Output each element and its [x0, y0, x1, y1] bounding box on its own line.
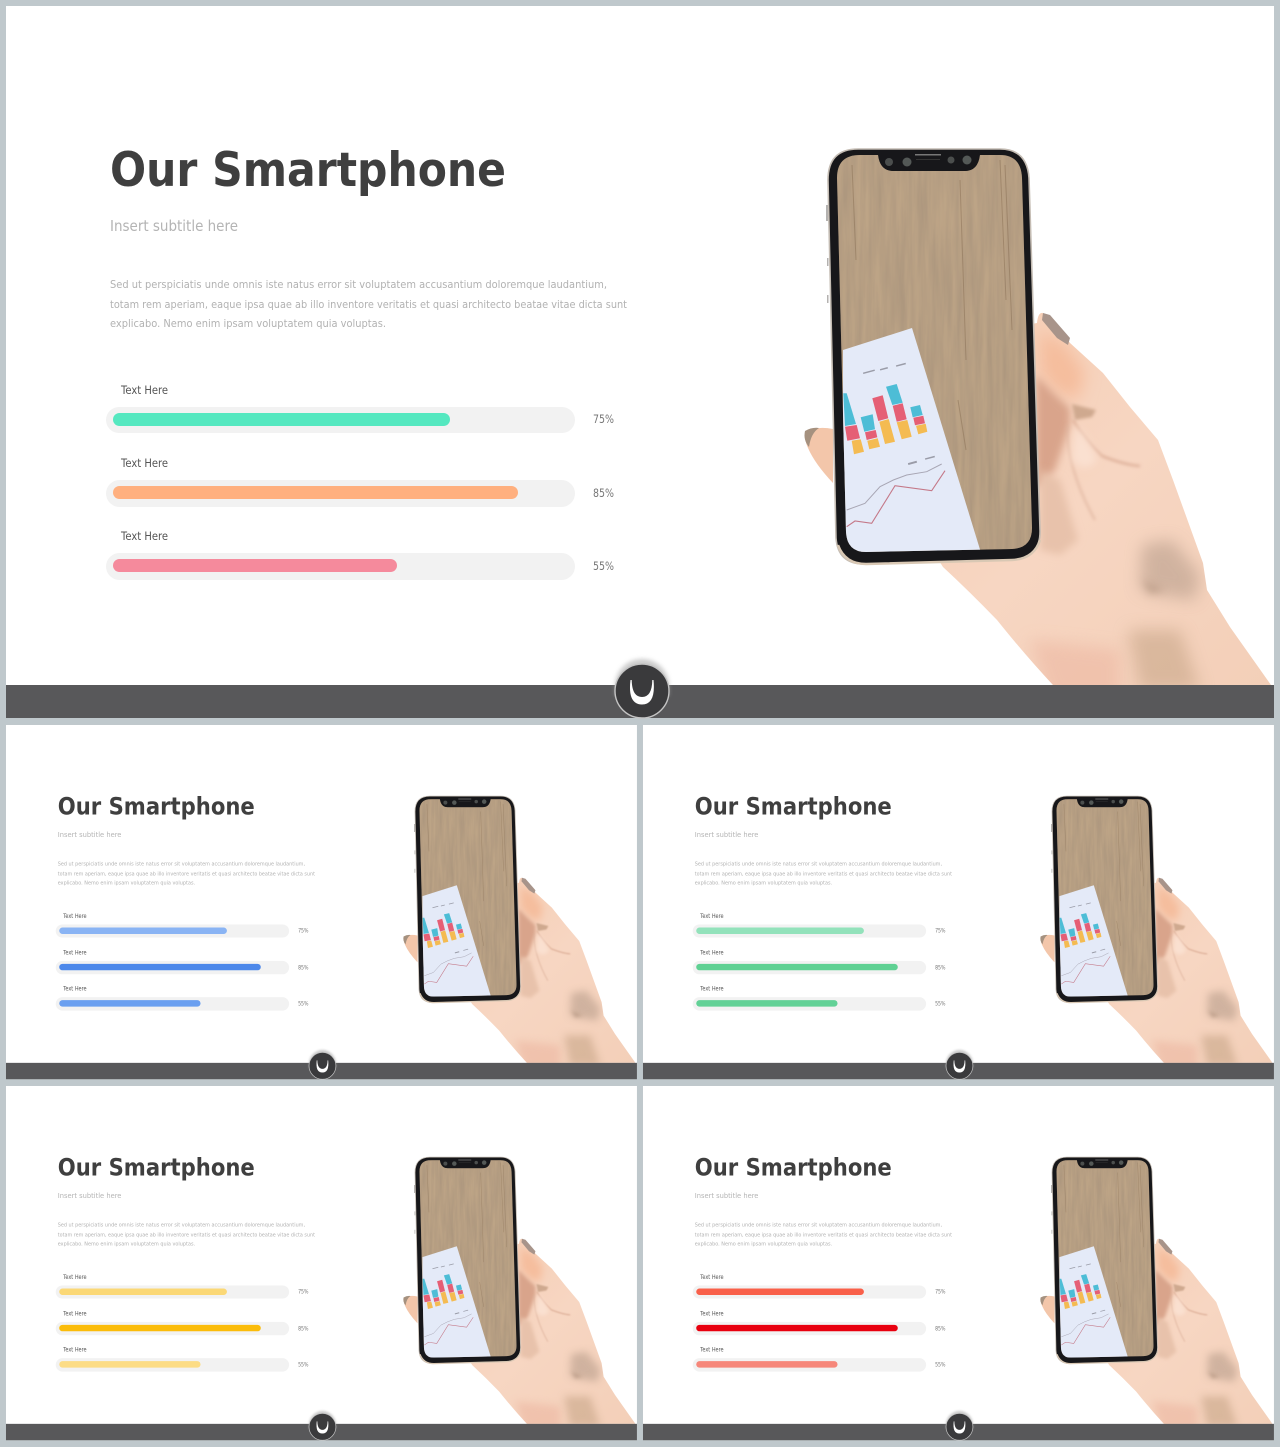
image: hand holding phone	[804, 149, 1271, 700]
body text: totam rem aperiam, eaque ipsa quae ab illo inventore veritatis et quasi architecto beatae vitae dicta sunt	[695, 871, 953, 877]
progress bar: 75%: Text Here	[62, 1275, 87, 1281]
body text: totam rem aperiam, eaque ipsa quae ab illo inventore veritatis et quasi architecto beatae vitae dicta sunt	[110, 298, 628, 311]
progress bar: 85%: 85%	[298, 1326, 309, 1332]
footer bar	[6, 1424, 637, 1440]
footer bar	[643, 1063, 1274, 1079]
title: Our Smartphone	[58, 1154, 255, 1182]
body text	[58, 861, 316, 887]
image: hand holding phone	[1040, 796, 1272, 1070]
image: hand holding phone	[403, 796, 635, 1070]
progress bar: 55%: 55%	[298, 1363, 309, 1369]
body text: Sed ut perspiciatis unde omnis iste natus error sit voluptatem accusantium doloremque laudantium,	[695, 1222, 942, 1228]
body text: explicabo. Nemo enim ipsam voluptatem quia voluptas.	[58, 1242, 195, 1248]
body text	[58, 1222, 316, 1248]
footer bar	[6, 1063, 637, 1079]
icon: logo badge	[615, 659, 669, 718]
progress bar: 85%	[693, 1311, 946, 1335]
progress bar: 75%	[56, 914, 309, 937]
progress bar: 55%: 55%	[935, 1002, 946, 1008]
icon: logo badge	[309, 1411, 336, 1440]
panel: red slide	[643, 1086, 1274, 1440]
progress bar: 85%: Text Here	[62, 950, 87, 956]
progress bar: 85%: 85%	[298, 965, 309, 971]
body text: explicabo. Nemo enim ipsam voluptatem quia voluptas.	[58, 881, 195, 887]
body text	[695, 861, 953, 887]
icon: logo badge	[946, 1050, 973, 1079]
progress bar: 75%: 75%	[298, 1289, 309, 1295]
footer bar	[643, 1424, 1274, 1440]
progress bar: 75%: Text Here	[699, 1275, 724, 1281]
title: Our Smartphone	[695, 793, 892, 821]
title: Our Smartphone	[58, 793, 255, 821]
progress bar: 55%	[56, 987, 309, 1011]
progress bar: 75%	[106, 383, 614, 433]
body text: explicabo. Nemo enim ipsam voluptatem quia voluptas.	[695, 881, 832, 887]
body text: totam rem aperiam, eaque ipsa quae ab illo inventore veritatis et quasi architecto beatae vitae dicta sunt	[695, 1232, 953, 1238]
progress bar: 85%	[693, 950, 946, 974]
progress bar: 75%	[56, 1275, 309, 1298]
panel: green slide	[643, 725, 1274, 1079]
body text: explicabo. Nemo enim ipsam voluptatem quia voluptas.	[110, 317, 386, 330]
progress bar: 75%: 75%	[593, 412, 614, 426]
title: Our Smartphone	[110, 143, 506, 198]
icon: logo badge	[309, 1050, 336, 1079]
footer bar	[6, 685, 1274, 718]
icon: logo badge	[946, 1411, 973, 1440]
body text: totam rem aperiam, eaque ipsa quae ab illo inventore veritatis et quasi architecto beatae vitae dicta sunt	[58, 871, 316, 877]
subtitle: Insert subtitle here	[58, 1191, 122, 1200]
progress bar: 85%: 85%	[935, 965, 946, 971]
progress bar: 85%	[56, 1311, 309, 1335]
progress bar: 55%: 55%	[298, 1002, 309, 1008]
subtitle: Insert subtitle here	[695, 830, 759, 839]
progress bar: 55%	[693, 987, 946, 1011]
subtitle: Insert subtitle here	[58, 830, 122, 839]
progress bar: 85%: 85%	[593, 486, 614, 500]
panel: blue slide	[6, 725, 637, 1079]
progress bar: 85%: Text Here	[699, 950, 724, 956]
body text: Sed ut perspiciatis unde omnis iste natus error sit voluptatem accusantium doloremque laudantium,	[58, 1222, 305, 1228]
image: hand holding phone	[403, 1157, 635, 1431]
progress bar: 55%	[693, 1348, 946, 1372]
progress bar: 55%	[56, 1348, 309, 1372]
progress bar: 75%: Text Here	[699, 914, 724, 920]
progress bar: 75%: 75%	[935, 1289, 946, 1295]
body text	[110, 278, 628, 330]
progress bar: 55%: Text Here	[62, 987, 87, 993]
progress bar: 75%: 75%	[935, 928, 946, 934]
progress bar: 85%: Text Here	[62, 1311, 87, 1317]
panel: main slide	[6, 6, 1274, 718]
subtitle: Insert subtitle here	[110, 217, 238, 235]
progress bar: 75%	[693, 914, 946, 937]
subtitle: Insert subtitle here	[695, 1191, 759, 1200]
progress bar: 85%: 85%	[935, 1326, 946, 1332]
progress bar: 85%: Text Here	[120, 456, 168, 470]
body text: totam rem aperiam, eaque ipsa quae ab illo inventore veritatis et quasi architecto beatae vitae dicta sunt	[58, 1232, 316, 1238]
body text: explicabo. Nemo enim ipsam voluptatem quia voluptas.	[695, 1242, 832, 1248]
progress bar: 55%: Text Here	[699, 1348, 724, 1354]
progress bar: 55%: 55%	[593, 559, 614, 573]
title: Our Smartphone	[695, 1154, 892, 1182]
progress bar: 85%	[56, 950, 309, 974]
image: hand holding phone	[1040, 1157, 1272, 1431]
progress bar: 75%: 75%	[298, 928, 309, 934]
progress bar: 75%: Text Here	[62, 914, 87, 920]
progress bar: 75%	[693, 1275, 946, 1298]
progress bar: 75%: Text Here	[120, 383, 168, 397]
body text: Sed ut perspiciatis unde omnis iste natus error sit voluptatem accusantium doloremque laudantium,	[58, 861, 305, 867]
progress bar: 85%	[106, 456, 614, 507]
progress bar: 85%: Text Here	[699, 1311, 724, 1317]
panel: yellow slide	[6, 1086, 637, 1440]
body text: Sed ut perspiciatis unde omnis iste natus error sit voluptatem accusantium doloremque laudantium,	[695, 861, 942, 867]
progress bar: 55%	[106, 529, 614, 580]
progress bar: 55%: Text Here	[699, 987, 724, 993]
body text	[695, 1222, 953, 1248]
progress bar: 55%: 55%	[935, 1363, 946, 1369]
progress bar: 55%: Text Here	[120, 529, 168, 543]
body text: Sed ut perspiciatis unde omnis iste natus error sit voluptatem accusantium doloremque laudantium,	[110, 278, 607, 291]
progress bar: 55%: Text Here	[62, 1348, 87, 1354]
